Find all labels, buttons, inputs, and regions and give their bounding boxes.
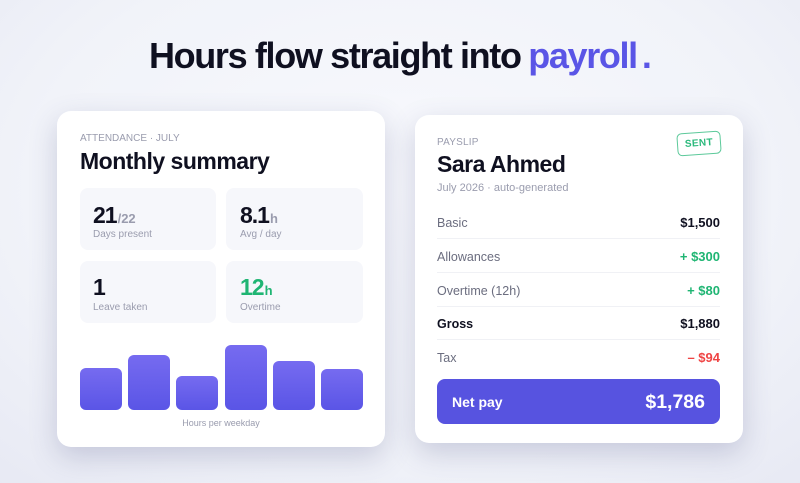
stat: days present: Days present (93, 229, 152, 240)
row: tax (437, 350, 720, 365)
eyebrow: attendance: ATTENDANCE · JULY (80, 133, 180, 144)
bar chart: hours per weekday (80, 345, 363, 428)
stat: days present: 21/22 (93, 202, 136, 228)
title: Hours flow straight into payroll. (149, 35, 650, 76)
stat: overtime: 12h (240, 274, 273, 300)
stat: average per day: Avg / day (240, 229, 282, 240)
row: basic: $1,500 (680, 215, 720, 230)
chart caption: Hours per weekday (182, 418, 260, 428)
net pay bar (437, 379, 720, 424)
row: allowances: Allowances (437, 250, 500, 264)
row: gross (437, 305, 720, 340)
row: basic: Basic (437, 216, 468, 230)
row: gross: Gross (437, 317, 473, 331)
row: tax: – $94 (687, 350, 720, 365)
stat: leave taken (80, 261, 216, 323)
employee name: Sara Ahmed (437, 151, 565, 177)
stat: overtime: Overtime (240, 302, 281, 313)
sent stamp: SENT (685, 137, 713, 150)
panel: payslip (415, 115, 743, 443)
row: allowances (437, 238, 720, 273)
sent stamp (676, 130, 722, 157)
row: overtime: Overtime (12h) (437, 284, 520, 298)
row: overtime (437, 272, 720, 307)
stat: average per day (226, 188, 363, 250)
row: tax: Tax (437, 351, 456, 365)
stat: leave taken: 1 (93, 274, 105, 300)
row: allowances: + $300 (680, 249, 720, 264)
panel: attendance summary (57, 111, 385, 447)
row: gross: $1,880 (680, 316, 720, 331)
stat: overtime (226, 261, 363, 323)
row: overtime: + $80 (687, 283, 720, 298)
net pay amount: $1,786 (645, 391, 705, 413)
heading: monthly summary: Monthly summary (80, 148, 269, 174)
stat: days present (80, 188, 216, 250)
net pay label: Net pay (452, 394, 503, 410)
stat: average per day: 8.1h (240, 202, 278, 228)
row: basic (437, 204, 720, 239)
stat: leave taken: Leave taken (93, 302, 148, 313)
payslip period: July 2026 · auto-generated (437, 182, 568, 194)
eyebrow: payslip: PAYSLIP (437, 137, 479, 148)
